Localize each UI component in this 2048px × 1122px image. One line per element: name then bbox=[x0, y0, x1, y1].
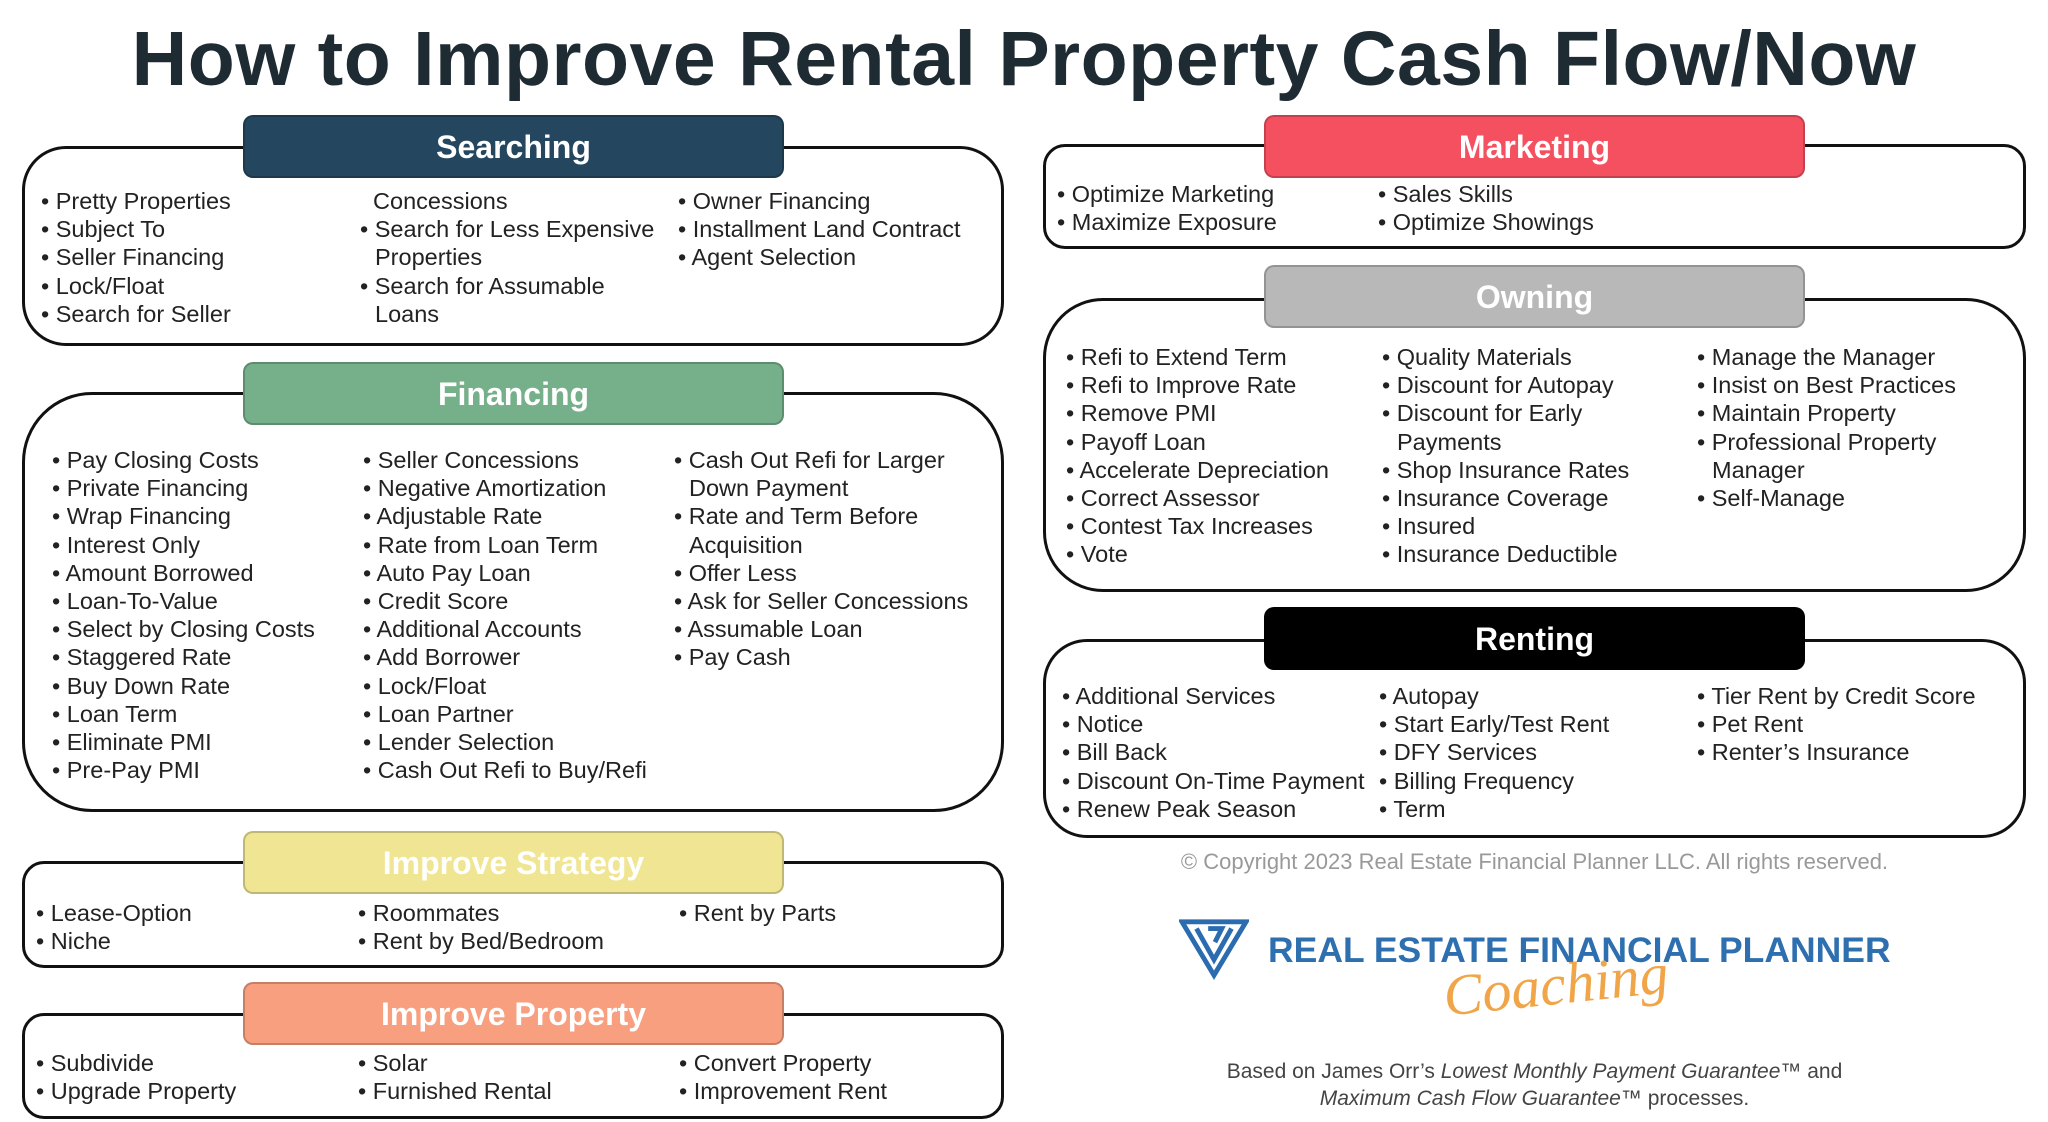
panel: improve strategy bbox=[22, 861, 1004, 968]
column: marketing 1 bbox=[1057, 181, 1277, 235]
logo text: REAL ESTATE FINANCIAL PLANNER bbox=[1268, 930, 1891, 970]
column: financing 2: • Adjustable Rate bbox=[363, 503, 542, 529]
column: searching 1 bbox=[41, 188, 231, 327]
column: owning 3: • Professional Property Manager bbox=[1697, 429, 1936, 483]
heading: renting: Renting bbox=[1475, 621, 1594, 657]
column: renting 3: • Tier Rent by Credit Score bbox=[1697, 683, 1976, 709]
panel: renting bbox=[1043, 639, 2026, 838]
column: financing 1: • Eliminate PMI bbox=[52, 729, 212, 755]
column: renting 2: • Billing Frequency bbox=[1379, 768, 1574, 794]
column: financing 1: • Select by Closing Costs bbox=[52, 616, 315, 642]
column: financing 2: • Additional Accounts bbox=[363, 616, 582, 642]
column: financing 1: • Amount Borrowed bbox=[52, 560, 254, 586]
column: renting 1: • Bill Back bbox=[1062, 739, 1167, 765]
column: property 3 bbox=[679, 1050, 887, 1104]
column: owning 3: • Manage the Manager bbox=[1697, 344, 1935, 370]
column: searching 1: • Search for Seller bbox=[41, 301, 231, 327]
column: strategy 1: • Niche bbox=[36, 928, 111, 954]
column: financing 1: • Pay Closing Costs bbox=[52, 447, 259, 473]
column: financing 2: • Lock/Float bbox=[363, 673, 486, 699]
title: How to Improve Rental Property Cash Flow/Now bbox=[132, 16, 1916, 102]
logo script: Coaching bbox=[1440, 940, 1671, 1029]
column: renting 1: • Discount On-Time Payment bbox=[1062, 768, 1365, 794]
column: renting 1: • Renew Peak Season bbox=[1062, 796, 1296, 822]
column: renting 2: • Start Early/Test Rent bbox=[1379, 711, 1609, 737]
column: property 2: • Solar bbox=[358, 1050, 428, 1076]
column: renting 3: • Pet Rent bbox=[1697, 711, 1803, 737]
column: searching 2: • Search for Assumable Loans bbox=[360, 273, 605, 327]
column: owning 2: • Insured bbox=[1382, 513, 1475, 539]
column: renting 2 bbox=[1379, 683, 1610, 822]
column: owning 2: • Discount for Autopay bbox=[1382, 372, 1614, 398]
heading: owning: Owning bbox=[1476, 279, 1593, 315]
column: marketing 2: • Optimize Showings bbox=[1378, 209, 1594, 235]
column: financing 1: • Interest Only bbox=[52, 532, 200, 558]
column: owning 1: • Contest Tax Increases bbox=[1066, 513, 1313, 539]
column: property 3: • Improvement Rent bbox=[679, 1078, 887, 1104]
column: strategy 1: • Lease-Option bbox=[36, 900, 192, 926]
column: renting 2: • Autopay bbox=[1379, 683, 1479, 709]
column: financing 2: • Cash Out Refi to Buy/Refi bbox=[363, 757, 647, 783]
column: property 1: • Upgrade Property bbox=[36, 1078, 236, 1104]
column: owning 1: • Accelerate Depreciation bbox=[1066, 457, 1329, 483]
column: renting 1: • Notice bbox=[1062, 711, 1143, 737]
column: owning 1: • Vote bbox=[1066, 541, 1128, 567]
column: strategy 2: • Rent by Bed/Bedroom bbox=[358, 928, 604, 954]
column: property 1: • Subdivide bbox=[36, 1050, 154, 1076]
column: financing 2 bbox=[363, 447, 647, 783]
heading: renting bbox=[1264, 607, 1805, 670]
column: searching 1: • Seller Financing bbox=[41, 244, 224, 270]
heading: owning bbox=[1264, 265, 1805, 328]
column: searching 1: • Pretty Properties bbox=[41, 188, 231, 214]
column: financing 1: • Private Financing bbox=[52, 475, 248, 501]
column: financing 2: • Add Borrower bbox=[363, 644, 520, 670]
column: property 1 bbox=[36, 1050, 236, 1104]
column: owning 1 bbox=[1066, 344, 1329, 567]
column: searching 3 bbox=[678, 188, 961, 270]
column: financing 2: • Rate from Loan Term bbox=[363, 532, 598, 558]
heading: financing bbox=[243, 362, 784, 425]
column: owning 3: • Self-Manage bbox=[1697, 485, 1845, 511]
column: owning 2: • Discount for Early Payments bbox=[1382, 400, 1582, 455]
column: owning 1: • Refi to Extend Term bbox=[1066, 344, 1287, 370]
column: property 2 bbox=[358, 1050, 552, 1104]
column: searching 1: • Lock/Float bbox=[41, 273, 164, 299]
column: searching 1: • Subject To bbox=[41, 216, 165, 242]
column: financing 1: • Staggered Rate bbox=[52, 644, 231, 670]
heading: marketing bbox=[1264, 115, 1805, 178]
column: financing 3: • Pay Cash bbox=[674, 644, 791, 670]
heading: marketing: Marketing bbox=[1459, 129, 1610, 165]
icon: triangle logo bbox=[1179, 919, 1249, 980]
column: renting 2: • DFY Services bbox=[1379, 739, 1537, 765]
column: financing 2: • Lender Selection bbox=[363, 729, 554, 755]
panel: improve property bbox=[22, 1013, 1004, 1119]
column: marketing 2 bbox=[1378, 181, 1594, 235]
column: marketing 1: • Optimize Marketing bbox=[1057, 181, 1274, 207]
column: financing 1: • Buy Down Rate bbox=[52, 673, 230, 699]
column: renting 3 bbox=[1697, 683, 1976, 765]
column: owning 2: • Quality Materials bbox=[1382, 344, 1572, 370]
column: financing 3: • Cash Out Refi for Larger Down Payment bbox=[674, 447, 945, 501]
column: owning 2: • Insurance Coverage bbox=[1382, 485, 1608, 511]
attribution bbox=[1227, 1060, 1842, 1110]
logo bbox=[1179, 919, 1891, 1029]
panel: marketing bbox=[1043, 144, 2026, 249]
column: financing 3: • Rate and Term Before Acquisition bbox=[674, 503, 918, 558]
heading: improve property: Improve Property bbox=[381, 996, 646, 1032]
column: strategy 2: • Roommates bbox=[358, 900, 499, 926]
column: financing 2: • Auto Pay Loan bbox=[363, 560, 531, 586]
column: strategy 3: • Rent by Parts bbox=[679, 900, 836, 926]
column: marketing 1: • Maximize Exposure bbox=[1057, 209, 1277, 235]
column: searching 3: • Installment Land Contract bbox=[678, 216, 961, 242]
column: strategy 2 bbox=[358, 900, 604, 954]
heading: improve strategy bbox=[243, 831, 784, 894]
attribution: Based on James Orr’s Lowest Monthly Payment Guarantee™ and bbox=[1227, 1060, 1842, 1083]
column: financing 2: • Loan Partner bbox=[363, 701, 514, 727]
heading: improve strategy: Improve Strategy bbox=[383, 845, 644, 881]
panel: searching bbox=[22, 146, 1004, 346]
column: owning 2: • Insurance Deductible bbox=[1382, 541, 1618, 567]
column: financing 2: • Seller Concessions bbox=[363, 447, 579, 473]
heading: searching bbox=[243, 115, 784, 178]
column: marketing 2: • Sales Skills bbox=[1378, 181, 1513, 207]
column: searching 2: Concessions bbox=[373, 188, 508, 214]
heading: financing: Financing bbox=[438, 376, 589, 412]
copyright: © Copyright 2023 Real Estate Financial Planner LLC. All rights reserved. bbox=[1181, 849, 1888, 874]
panel: owning bbox=[1043, 298, 2026, 592]
column: owning 3 bbox=[1697, 344, 1956, 511]
column: financing 1: • Pre-Pay PMI bbox=[52, 757, 200, 783]
panel: financing bbox=[22, 392, 1004, 812]
column: financing 3 bbox=[674, 447, 968, 670]
column: owning 2 bbox=[1382, 344, 1629, 567]
column: owning 1: • Correct Assessor bbox=[1066, 485, 1260, 511]
column: owning 3: • Insist on Best Practices bbox=[1697, 372, 1956, 398]
column: owning 1: • Remove PMI bbox=[1066, 400, 1217, 426]
column: property 2: • Furnished Rental bbox=[358, 1078, 552, 1104]
column: renting 1: • Additional Services bbox=[1062, 683, 1275, 709]
column: property 3: • Convert Property bbox=[679, 1050, 871, 1076]
column: searching 3: • Owner Financing bbox=[678, 188, 870, 214]
column: financing 1: • Wrap Financing bbox=[52, 503, 231, 529]
column: financing 3: • Offer Less bbox=[674, 560, 797, 586]
column: renting 2: • Term bbox=[1379, 796, 1446, 822]
heading: improve property bbox=[243, 982, 784, 1045]
column: renting 3: • Renter’s Insurance bbox=[1697, 739, 1909, 765]
column: searching 2: • Search for Less Expensive Properties bbox=[360, 216, 654, 270]
column: owning 2: • Shop Insurance Rates bbox=[1382, 457, 1629, 483]
column: financing 3: • Assumable Loan bbox=[674, 616, 863, 642]
column: financing 1: • Loan Term bbox=[52, 701, 177, 727]
column: financing 1: • Loan-To-Value bbox=[52, 588, 218, 614]
column: renting 1 bbox=[1062, 683, 1365, 822]
column: financing 2: • Negative Amortization bbox=[363, 475, 606, 501]
column: strategy 1 bbox=[36, 900, 192, 954]
column: searching 2 bbox=[360, 188, 654, 327]
column: owning 1: • Refi to Improve Rate bbox=[1066, 372, 1296, 398]
column: searching 3: • Agent Selection bbox=[678, 244, 856, 270]
column: owning 1: • Payoff Loan bbox=[1066, 429, 1206, 455]
column: financing 1 bbox=[52, 447, 315, 783]
column: financing 2: • Credit Score bbox=[363, 588, 508, 614]
attribution: Maximum Cash Flow Guarantee™ processes. bbox=[1320, 1087, 1749, 1110]
heading: searching: Searching bbox=[436, 129, 591, 165]
column: owning 3: • Maintain Property bbox=[1697, 400, 1896, 426]
column: financing 3: • Ask for Seller Concessions bbox=[674, 588, 968, 614]
